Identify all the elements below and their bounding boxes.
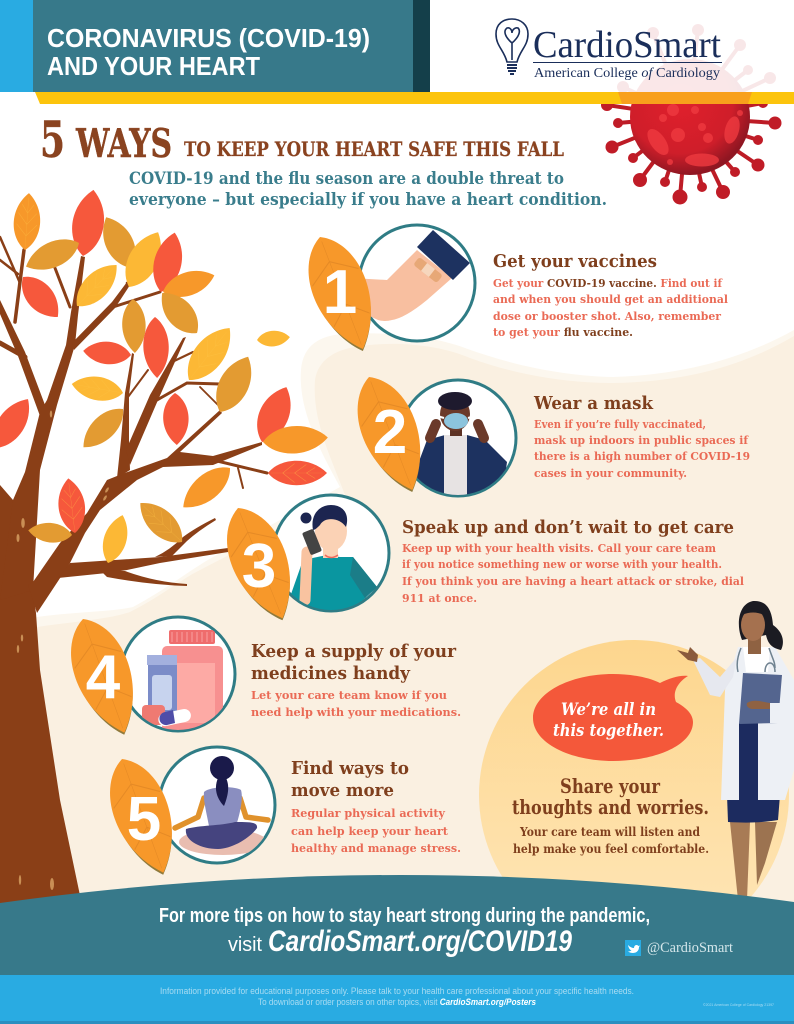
share your thoughts text: Your care team will listen and [519, 824, 700, 839]
step 1 text [493, 251, 729, 339]
logo: CardioSmart: CardioSmart [533, 24, 721, 66]
footer: blue legal band [0, 975, 794, 1024]
circle: woman on phone [273, 495, 389, 612]
step 4 text: Keep a supply of your [251, 641, 456, 662]
number leaf 5 [96, 750, 190, 884]
header title text: AND YOUR HEART [47, 51, 260, 81]
logo: CardioSmart [496, 19, 722, 81]
step 2 text: mask up indoors in public spaces if [534, 433, 749, 447]
footer call to action: visit [228, 934, 262, 956]
yellow circle behind doctor [479, 640, 789, 950]
speech bubble [533, 674, 693, 761]
header: blue tab [0, 0, 33, 92]
header: yellow band [35, 92, 794, 104]
number leaf 5: 5 [127, 785, 161, 854]
step 3 text: If you think you are having a heart attack or stroke, dial [402, 574, 745, 588]
tree leaves [0, 187, 329, 566]
circle: man wearing mask [400, 380, 516, 497]
step 5 text: Find ways to [291, 758, 409, 779]
step 1: get your vaccines [294, 225, 729, 360]
step 4 text: need help with your medications. [251, 705, 461, 719]
circle: woman meditating [159, 747, 275, 863]
number leaf 3: 3 [242, 532, 276, 601]
number leaf 3 [213, 498, 309, 630]
legal text: To download or order posters on other topics, visit CardioSmart.org/Posters [258, 997, 536, 1007]
step 3: speak up [213, 495, 745, 630]
number leaf 1: 1 [323, 258, 357, 327]
share your thoughts text: help make you feel comfortable. [513, 841, 709, 856]
background: cream blob [0, 336, 794, 905]
footer call to action [159, 905, 650, 958]
step 4 text: medicines handy [251, 663, 411, 684]
doctor figure [677, 601, 794, 900]
step 2 text [533, 393, 750, 480]
icon: light bulb with heart [496, 19, 528, 74]
autumn tree [0, 187, 329, 905]
step 1 text: and when you should get an additional [493, 292, 729, 306]
circle: medicine bottles [121, 617, 235, 731]
subtitle: everyone – but especially if you have a heart condition. [129, 190, 607, 209]
footer: teal panel [0, 875, 794, 976]
step 5 text: healthy and manage stress. [291, 841, 461, 855]
header: teal title panel [33, 0, 430, 92]
speech bubble: this together. [553, 721, 664, 741]
share your thoughts text: Share your [560, 774, 660, 798]
step 3 text: 911 at once. [402, 591, 477, 605]
number leaf 1 [294, 227, 389, 360]
title: 5 ways: TO KEEP YOUR HEART SAFE THIS FALL [184, 137, 564, 161]
background: pale cream blob [0, 330, 794, 905]
step 1 text: to get your flu vaccine. [493, 325, 633, 339]
circle: arm with bandage [350, 225, 475, 341]
step 3 text: Speak up and don’t wait to get care [402, 517, 734, 538]
header title text [47, 23, 370, 81]
tree trunk and branches [0, 237, 267, 905]
step 5 text: move more [291, 780, 394, 801]
header title text: CORONAVIRUS (COVID-19) [47, 23, 370, 53]
share your thoughts text: thoughts and worries. [512, 795, 709, 819]
step 2 text: cases in your community. [534, 466, 687, 480]
step 2: wear a mask [358, 377, 750, 498]
number leaf 2: 2 [373, 398, 407, 467]
step 3 text: Keep up with your health visits. Call your care team [402, 541, 716, 555]
step 4: medicines [71, 616, 460, 735]
step 5 text: can help keep your heart [291, 824, 449, 838]
step 2 text: Wear a mask [533, 393, 653, 414]
step 5 text [291, 758, 461, 855]
footer call to action: For more tips on how to stay heart strong during the pandemic, [159, 905, 650, 927]
speech bubble: We’re all in [561, 700, 656, 720]
subtitle [129, 169, 607, 209]
trunk marks [16, 410, 110, 890]
icon: twitter [625, 940, 641, 956]
copyright: ©2021 American College of Cardiology 21397 [703, 1003, 774, 1007]
footer call to action: CardioSmart.org/COVID19 [268, 925, 572, 958]
number leaf 4 [57, 610, 151, 744]
coronavirus illustration [601, 24, 782, 204]
step 5 text: Regular physical activity [291, 806, 445, 820]
step 4 text [251, 641, 461, 719]
legal text [160, 986, 634, 1007]
step 2 text: there is a high number of COVID-19 [534, 449, 750, 463]
title: 5 ways: WAYS [75, 121, 172, 167]
step 2 text: Even if you’re fully vaccinated, [534, 417, 706, 431]
step 4 text: Let your care team know if you [251, 688, 447, 702]
twitter handle: @CardioSmart [647, 940, 734, 956]
step 1 text: Get your COVID-19 vaccine. Find out if [493, 276, 723, 290]
share your thoughts text [512, 774, 709, 856]
legal text: Information provided for educational purposes only. Please talk to your health care professional about your specific health needs. [160, 986, 634, 996]
step 1 text: Get your vaccines [493, 251, 657, 272]
step 5: move more [96, 747, 461, 884]
number leaf 4: 4 [86, 643, 121, 712]
title: 5 ways [40, 110, 564, 169]
step 3 text [402, 517, 745, 605]
logo: CardioSmart: American College of Cardiology [534, 66, 720, 81]
subtitle: COVID-19 and the flu season are a double threat to [129, 169, 564, 188]
step 3 text: if you notice something new or worse with your health. [402, 557, 722, 571]
number leaf 2 [343, 367, 439, 501]
step 1 text: dose or booster shot. Also, remember [493, 309, 722, 323]
title: 5 ways: 5 [40, 110, 65, 169]
